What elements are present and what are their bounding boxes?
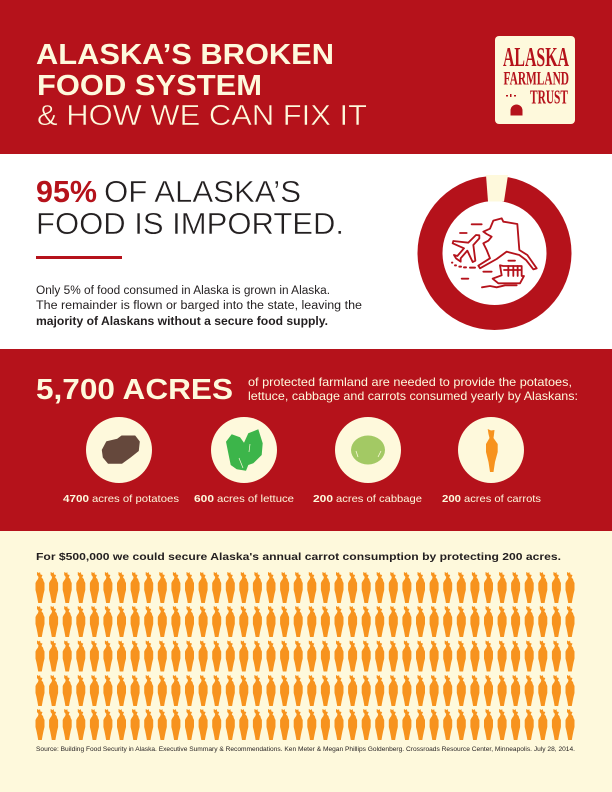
heading: 95% of Alaska's food is imported: 95%: [36, 175, 97, 209]
logo: Alaska Farmland Trust: FARMLAND: [504, 68, 569, 90]
pictogram: 200 carrots: [36, 572, 574, 740]
logo: Alaska Farmland Trust: TRUST: [530, 88, 568, 108]
divider rule: [36, 256, 122, 259]
item: carrots: [442, 417, 541, 505]
heading: 95% of Alaska's food is imported: FOOD IS IMPORTED.: [36, 207, 344, 241]
acres description: [248, 375, 578, 403]
item: lettuce: [194, 417, 294, 505]
item: potatoes: 4700: [63, 493, 89, 505]
heading: 95% of Alaska's food is imported: [36, 175, 344, 241]
body text: [36, 285, 362, 328]
acres description: of protected farmland are needed to provide the potatoes,: [248, 375, 572, 389]
title: [36, 39, 334, 102]
item: cabbage: acres of cabbage: [336, 493, 422, 505]
item: carrots: acres of carrots: [464, 493, 541, 505]
item: potatoes: [63, 417, 179, 505]
item: lettuce: acres of lettuce: [217, 493, 294, 505]
heading: 95% of Alaska's food is imported: OF ALASKA’S: [104, 175, 301, 209]
acres description: lettuce, cabbage and carrots consumed yearly by Alaskans:: [248, 389, 578, 403]
body text: The remainder is flown or barged into the state, leaving the: [36, 300, 362, 312]
body text: majority of Alaskans without a secure food supply.: [36, 316, 328, 328]
item: lettuce: 600: [194, 493, 214, 505]
item: carrots: 200: [442, 493, 461, 505]
panel: header: [0, 0, 612, 154]
item: cabbage: [313, 417, 422, 505]
body text: Only 5% of food consumed in Alaska is grown in Alaska.: [36, 285, 330, 297]
panel: carrot consumption: [0, 531, 612, 792]
item: potatoes: acres of potatoes: [92, 493, 179, 505]
icon: Alaska map, plane and barge: [452, 218, 537, 287]
logo: Alaska Farmland Trust: [495, 36, 575, 124]
stat: 5,700 acres: 5,700 ACRES: [36, 374, 233, 406]
source note: Source: Building Food Security in Alaska. Executive Summary & Recommendations. Ken Meter & Megan Phillips Goldenberg. Crossroads Resource Center, Minneapolis. July 28, 2014.: [36, 746, 575, 753]
panel: 5,700 acres: [0, 349, 612, 531]
title: FOOD SYSTEM: [37, 70, 262, 102]
title: ALASKA’S BROKEN: [36, 39, 334, 71]
item: cabbage: 200: [313, 493, 333, 505]
subtitle: & HOW WE CAN FIX IT: [37, 100, 367, 132]
callout heading: For $500,000 we could secure Alaska's annual carrot consumption by protecting 200 acres.: [36, 551, 561, 563]
donut chart: 95% imported: [430, 175, 559, 318]
panel: imported food: [0, 154, 612, 349]
